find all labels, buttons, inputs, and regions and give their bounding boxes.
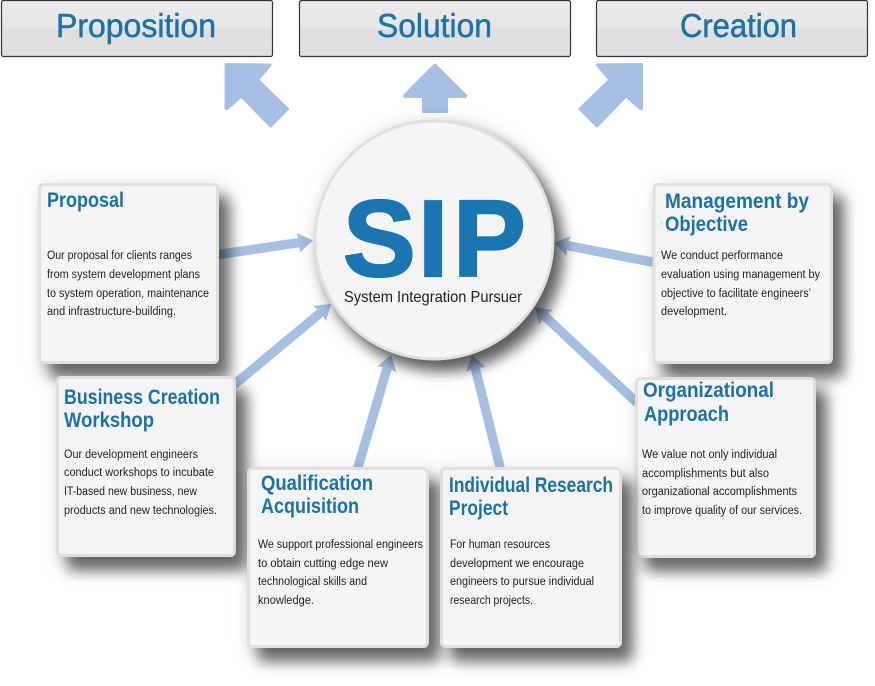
heading: Proposal: Proposal [47,189,124,212]
arrow: up to Solution [404,65,466,112]
body: Organizational Approach: organizational accomplishments [642,486,797,498]
panel: Organizational Approach [636,378,814,556]
body: Management by Objective [661,250,820,318]
header: Creation: Creation [680,7,797,44]
body: Individual Research Project: research projects. [450,595,533,607]
arrow: Qualification Acquisition to SIP [348,352,401,471]
body: Management by Objective: We conduct performance [661,250,783,262]
body: Proposal [47,250,209,318]
heading: Management by Objective: Management by [665,190,809,213]
body: Business Creation Workshop: products and new technologies. [64,505,217,517]
body: Individual Research Project: For human resources [450,539,550,551]
heading: Qualification Acquisition [261,472,373,518]
body: Management by Objective: evaluation using management by [661,269,820,281]
arrow: Management by Objective to SIP [552,233,655,272]
body: Management by Objective: development. [661,306,727,318]
body: Individual Research Project [450,539,594,607]
body: Individual Research Project: development we encourage [450,558,584,570]
body: Organizational Approach: accomplishments but also [642,468,769,480]
body: Organizational Approach: We value not only individual [642,449,777,461]
header: Solution: Solution [377,7,492,44]
heading: Qualification Acquisition: Acquisition [261,495,359,518]
body: Business Creation Workshop: conduct workshops to incubate [64,467,214,479]
SIP subtitle: System Integration Pursuer [344,289,523,306]
body: Qualification Acquisition: We support professional engineers [258,539,423,551]
body: Proposal: Our proposal for clients ranges [47,250,192,262]
heading: Organizational Approach [643,379,774,426]
header: Proposition [2,0,272,56]
panel: Management by Objective [654,184,832,362]
arrow: Organizational Approach to SIP [528,300,644,410]
body: Qualification Acquisition: knowledge. [258,595,314,607]
heading: Management by Objective [665,190,809,236]
body: Organizational Approach [642,449,802,517]
heading: Individual Research Project [449,474,613,520]
SIP logotype: SIP [343,178,526,300]
heading: Individual Research Project: Project [449,497,508,520]
central circle: SIP [315,121,553,359]
body: Business Creation Workshop: IT-based new business, new [64,486,198,498]
heading: Organizational Approach: Organizational [643,379,774,402]
heading: Management by Objective: Objective [665,213,748,236]
heading: Organizational Approach: Approach [644,403,729,426]
body: Qualification Acquisition [258,539,423,607]
body: Qualification Acquisition: to obtain cutting edge new [258,558,389,570]
body: Organizational Approach: to improve quality of our services. [642,505,802,517]
heading: Business Creation Workshop [64,386,220,432]
arrow: up-left to Proposition [226,64,288,126]
arrow: up-right to Creation [580,64,642,126]
body: Individual Research Project: engineers to pursue individual [450,576,594,588]
panel: Qualification Acquisition [248,468,428,646]
arrow: Proposal to SIP [217,231,314,265]
body: Proposal: to system operation, maintenance [47,288,209,300]
header: Proposition: Proposition [56,7,216,44]
heading: Business Creation Workshop: Workshop [64,409,154,432]
panel: Business Creation Workshop [58,378,234,556]
heading: Qualification Acquisition: Qualification [261,472,373,495]
body: Business Creation Workshop [64,449,217,517]
panel: Individual Research Project [442,468,620,646]
header: Solution [300,0,570,56]
heading: Business Creation Workshop: Business Creation [64,386,220,409]
body: Proposal: from system development plans [47,269,200,281]
arrow: Business Creation Workshop to SIP [228,296,337,392]
body: Proposal: and infrastructure-building. [47,306,176,318]
heading: Individual Research Project: Individual Research [449,474,613,497]
header: Creation [596,0,868,56]
arrow: Individual Research Project to SIP [462,353,510,470]
body: Management by Objective: objective to facilitate engineers’ [661,288,811,300]
body: Business Creation Workshop: Our development engineers [64,449,198,461]
panel: Proposal [40,184,218,362]
body: Qualification Acquisition: technological skills and [258,576,367,588]
